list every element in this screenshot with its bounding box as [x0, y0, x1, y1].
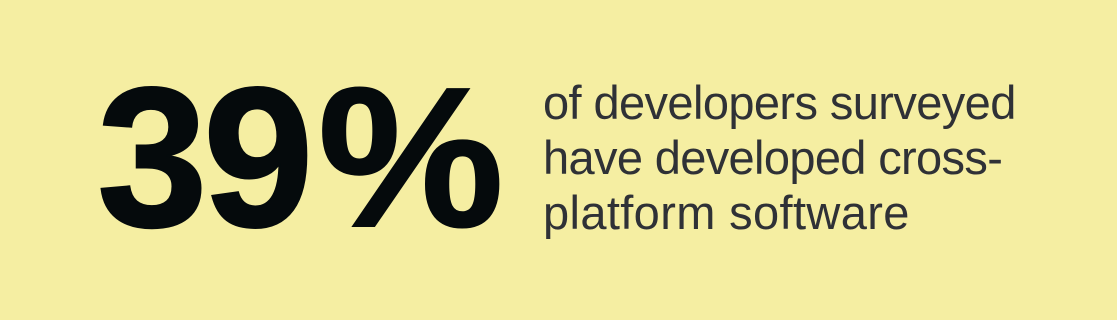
big statistic: 39%: 3: [97, 47, 208, 269]
description text: platform software: [543, 186, 910, 239]
description text: of developers surveyed: [543, 76, 1016, 129]
description text: [543, 76, 1016, 239]
description text: have developed cross-: [543, 131, 1002, 184]
big statistic: 39%: [97, 47, 504, 269]
big statistic: 39%: %: [318, 47, 504, 269]
big statistic: 39%: 9: [203, 47, 314, 269]
